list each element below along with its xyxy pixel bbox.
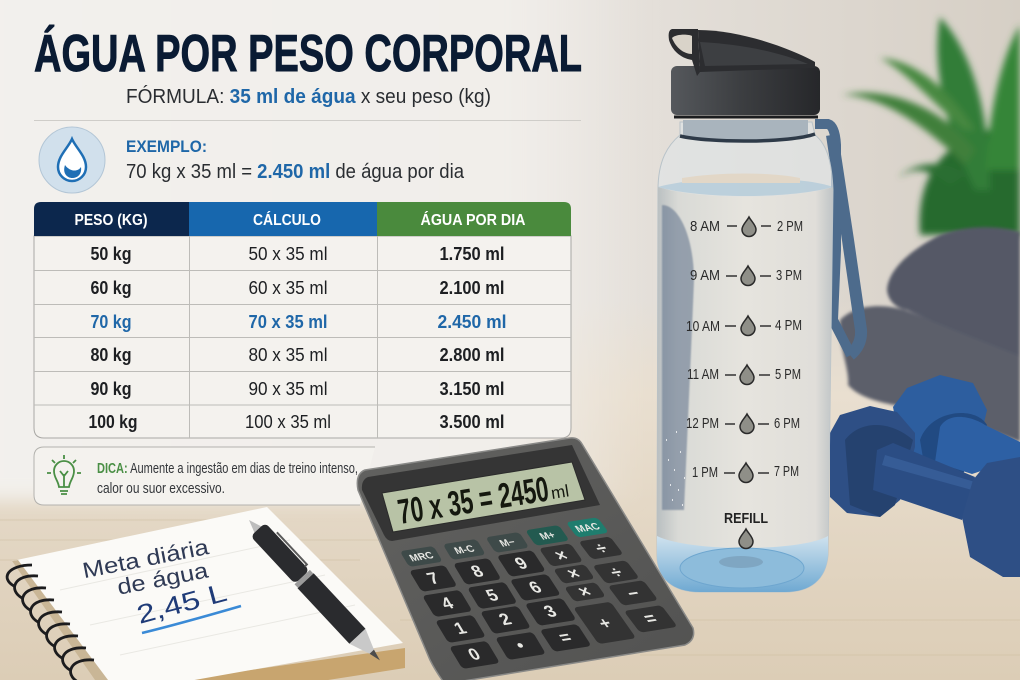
time markings: REFILL bbox=[724, 510, 768, 527]
handwritten note: de água bbox=[115, 557, 211, 600]
underline bbox=[142, 606, 241, 633]
table rows: 60 kg bbox=[90, 278, 132, 298]
table rows: 2.100 ml bbox=[440, 278, 504, 298]
time markings: 8 AM bbox=[690, 218, 720, 235]
table rows: 60 x 35 ml bbox=[248, 278, 328, 298]
function keys: MRC bbox=[408, 551, 437, 564]
number keys: 5 bbox=[482, 586, 502, 605]
bottle body bbox=[657, 122, 833, 592]
grid lines bbox=[34, 236, 571, 438]
tip text: calor ou suor excessivo. bbox=[97, 481, 225, 497]
pen bbox=[241, 512, 389, 668]
calculator body bbox=[357, 438, 694, 680]
icon: light bulb bbox=[47, 455, 81, 494]
divider bbox=[34, 120, 581, 121]
number keys: 4 bbox=[437, 594, 457, 613]
number keys: 7 bbox=[423, 569, 443, 588]
calculator display: ml bbox=[550, 481, 570, 503]
time markings: 2 PM bbox=[777, 218, 803, 235]
number keys: 8 bbox=[467, 562, 487, 581]
time markings: 4 PM bbox=[775, 317, 802, 334]
formula subtitle: FÓRMULA: 35 ml de água x seu peso (kg) bbox=[126, 85, 491, 108]
table rows: 2.450 ml bbox=[438, 312, 506, 332]
table body bbox=[34, 236, 571, 438]
table rows: 2.800 ml bbox=[440, 345, 504, 365]
time markings: 9 AM bbox=[690, 267, 720, 284]
table rows: 100 kg bbox=[88, 412, 138, 432]
water bbox=[657, 187, 833, 550]
number keys bbox=[409, 536, 678, 669]
table rows: 50 x 35 ml bbox=[248, 244, 328, 264]
table rows: 70 kg bbox=[90, 312, 132, 332]
number keys: + bbox=[594, 614, 616, 633]
handwritten note: Meta diária bbox=[80, 534, 212, 583]
header: água por dia bbox=[377, 202, 571, 236]
table rows bbox=[88, 244, 506, 432]
towel reflection bbox=[662, 205, 694, 510]
table rows: 100 x 35 ml bbox=[245, 412, 331, 432]
function keys: M-C bbox=[453, 544, 478, 557]
number keys: 0 bbox=[464, 645, 484, 664]
handwritten note: 2,45 L bbox=[133, 577, 230, 630]
bottle cap bbox=[671, 66, 820, 115]
table rows: 90 x 35 ml bbox=[248, 379, 328, 399]
time markings: 6 PM bbox=[774, 415, 800, 432]
table rows: 90 kg bbox=[90, 379, 132, 399]
example block: 70 kg x 35 ml = 2.450 ml de água por dia bbox=[126, 161, 465, 183]
spiral binding bbox=[7, 565, 94, 680]
time markings: 3 PM bbox=[776, 267, 802, 284]
bottle strap bbox=[815, 124, 861, 355]
tip text bbox=[97, 461, 358, 497]
number keys: 6 bbox=[525, 578, 546, 597]
number keys: × bbox=[550, 546, 572, 565]
towels bbox=[840, 227, 1020, 442]
tip text: DICA: Aumente a ingestão em dias de treino intenso, bbox=[97, 461, 358, 477]
time markings bbox=[686, 217, 803, 548]
calculator bbox=[357, 438, 694, 680]
example block bbox=[126, 137, 465, 183]
number keys: 3 bbox=[540, 602, 561, 621]
bottle base bbox=[657, 536, 828, 592]
water bottle bbox=[657, 29, 861, 592]
function keys bbox=[400, 517, 609, 567]
table rows: 1.750 ml bbox=[440, 244, 504, 264]
time markings: 10 AM bbox=[686, 318, 720, 335]
flip lid bbox=[698, 30, 815, 72]
time markings: 7 PM bbox=[774, 463, 799, 480]
number keys: ÷ bbox=[605, 563, 627, 582]
calculator display: 70 x 35 = 2450 bbox=[395, 470, 551, 532]
example block: EXEMPLO: bbox=[126, 137, 207, 156]
number keys: 2 bbox=[495, 610, 515, 629]
table rows: 80 x 35 ml bbox=[248, 345, 328, 365]
header: água por dia: ÁGUA POR DIA bbox=[420, 210, 526, 229]
function keys: MAC bbox=[573, 521, 603, 535]
table rows: 70 x 35 ml bbox=[248, 312, 328, 332]
number keys: = bbox=[555, 628, 576, 647]
number keys: − bbox=[622, 584, 645, 603]
number keys: ÷ bbox=[590, 539, 612, 558]
time markings: 12 PM bbox=[686, 415, 719, 432]
function keys: M+ bbox=[537, 530, 558, 542]
header: cálculo: CÁLCULO bbox=[253, 210, 321, 229]
time markings: 1 PM bbox=[692, 464, 718, 481]
header: cálculo bbox=[189, 202, 377, 236]
table bbox=[34, 202, 571, 438]
dumbbells bbox=[830, 375, 1020, 577]
table rows: 50 kg bbox=[90, 244, 132, 264]
plant bbox=[842, 17, 1020, 235]
table rows: 3.500 ml bbox=[440, 412, 504, 432]
number keys: 9 bbox=[511, 554, 532, 573]
function keys: M− bbox=[498, 538, 518, 549]
table rows: 3.150 ml bbox=[440, 379, 504, 399]
table rows: 80 kg bbox=[90, 345, 132, 365]
neck ring bbox=[683, 120, 808, 141]
number keys: × bbox=[574, 582, 596, 601]
number keys: 1 bbox=[450, 619, 470, 638]
header: peso: PESO (KG) bbox=[74, 212, 148, 229]
number keys: × bbox=[563, 564, 585, 583]
icon: water drop bbox=[39, 127, 105, 193]
tip box bbox=[34, 447, 375, 505]
handwritten note bbox=[80, 534, 230, 630]
number keys: • bbox=[512, 636, 528, 655]
time markings: 11 AM bbox=[687, 366, 719, 383]
notebook bbox=[7, 507, 405, 680]
time markings: 5 PM bbox=[775, 366, 801, 383]
header: peso bbox=[34, 202, 189, 236]
title: ÁGUA POR PESO CORPORAL bbox=[34, 25, 582, 83]
number keys: = bbox=[639, 609, 662, 628]
